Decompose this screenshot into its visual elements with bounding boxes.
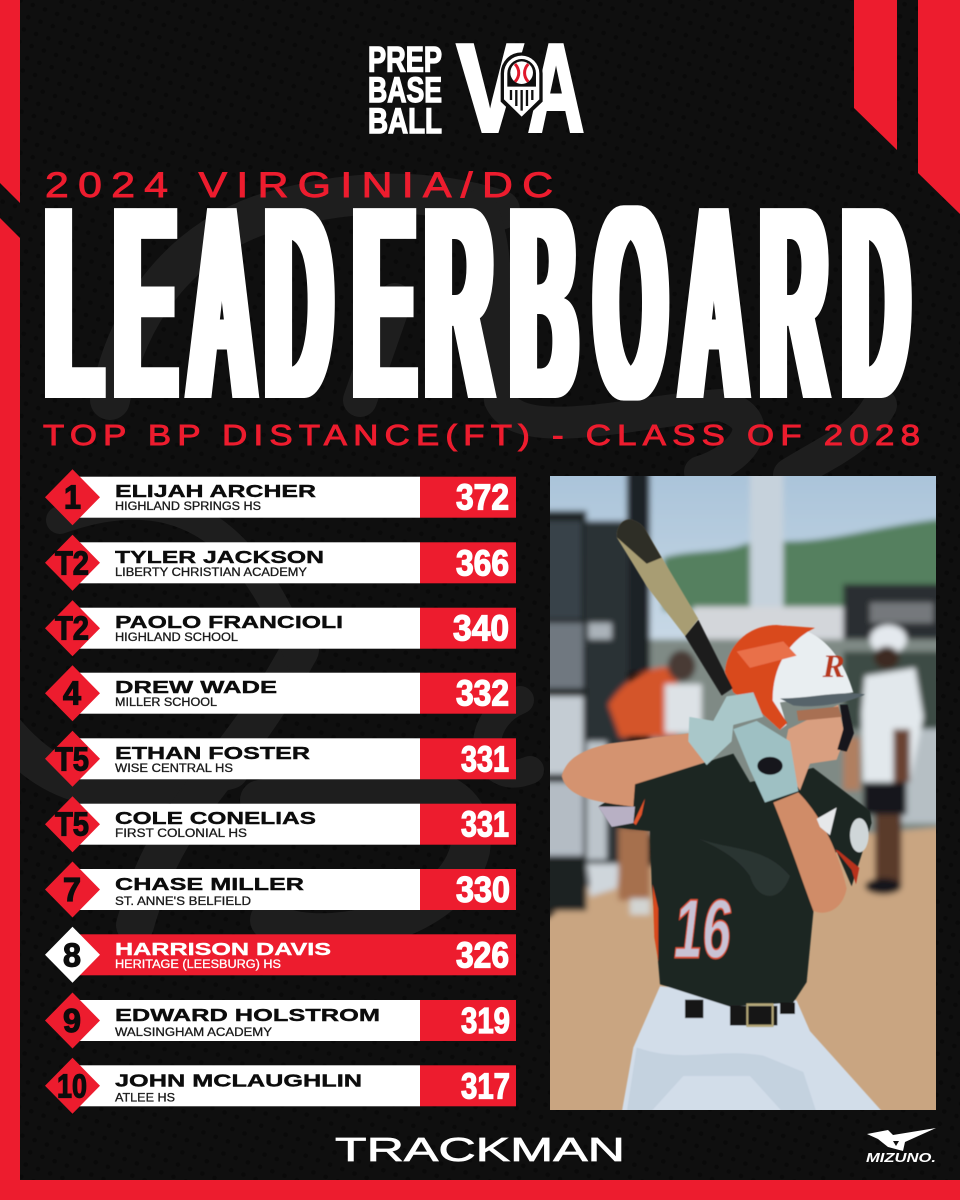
row 5: T5	[55, 740, 89, 777]
row 7: CHASE MILLER	[115, 874, 305, 894]
row 2	[45, 535, 516, 591]
row 8 highlighted: 8	[63, 936, 81, 973]
row 10: JOHN MCLAUGHLIN	[115, 1070, 362, 1090]
helmet logo: R	[822, 648, 845, 685]
logo wordmark: BALL	[368, 102, 442, 141]
title: Leaderboard: LEADERBOARD	[46, 148, 909, 457]
photo background, blurred field	[543, 468, 943, 1129]
row 4: 332	[456, 673, 509, 714]
row 7	[45, 862, 516, 918]
row 3: PAOLO FRANCIOLI	[115, 612, 343, 632]
logo wordmark: BASE	[368, 71, 442, 110]
row 5: WISE CENTRAL HS	[115, 763, 233, 775]
row 4: DREW WADE	[115, 677, 277, 697]
jersey number: 16	[674, 883, 731, 976]
row 8 highlighted: 326	[456, 934, 509, 975]
row 8 highlighted: HARRISON DAVIS	[115, 939, 331, 959]
row 3	[45, 600, 516, 656]
row 9: EDWARD HOLSTROM	[115, 1005, 380, 1025]
batter figure	[562, 519, 883, 1113]
row 6: FIRST COLONIAL HS	[115, 828, 247, 840]
row 9	[45, 992, 516, 1048]
icon: baseball shield	[501, 52, 543, 122]
row 1: 1	[64, 479, 81, 516]
row 10: 317	[461, 1065, 510, 1106]
row 4: MILLER SCHOOL	[115, 697, 218, 709]
row 3: 340	[453, 608, 509, 649]
icon: runbird	[867, 1128, 936, 1151]
row 5: 331	[461, 738, 509, 779]
row 10	[45, 1058, 516, 1114]
row 3: HIGHLAND SCHOOL	[115, 632, 239, 644]
row 1: 372	[456, 477, 509, 518]
row 5	[45, 731, 516, 787]
row 1: HIGHLAND SPRINGS HS	[115, 501, 261, 513]
row 5: ETHAN FOSTER	[115, 743, 311, 763]
row 9: WALSINGHAM ACADEMY	[115, 1027, 272, 1039]
row 9: 9	[63, 1002, 81, 1039]
row 7: ST. ANNE'S BELFIELD	[115, 896, 251, 908]
heading: 2024 Virginia/DC: 2024 VIRGINIA/DC	[45, 167, 553, 205]
row 4	[45, 665, 516, 721]
row 8 highlighted: HERITAGE (LEESBURG) HS	[115, 959, 281, 971]
row 6: COLE CONELIAS	[115, 808, 316, 828]
logo letters VA: V	[457, 20, 523, 158]
Mizuno wordmark: MIZUNO.	[866, 1150, 936, 1165]
row 1: ELIJAH ARCHER	[115, 481, 317, 501]
row 6: T5	[55, 806, 89, 843]
logo wordmark: PREP	[368, 40, 442, 80]
row 1	[45, 469, 516, 525]
photo: batter in stance	[543, 468, 943, 1129]
row 8 highlighted	[45, 927, 516, 983]
subheading: Top BP Distance: TOP BP DISTANCE(FT) - CLASS OF 2028	[43, 419, 920, 451]
row 2: 366	[456, 542, 509, 583]
row 2: LIBERTY CHRISTIAN ACADEMY	[115, 567, 307, 579]
row 10: 10	[57, 1067, 87, 1104]
row 3: T2	[55, 610, 89, 647]
row 6	[45, 796, 516, 852]
sponsor: Mizuno	[866, 1128, 936, 1165]
row 6: 331	[461, 804, 509, 845]
leaderboard list	[45, 469, 516, 1114]
row 7: 330	[456, 869, 510, 910]
row 9: 319	[461, 1000, 510, 1041]
row 2: T2	[55, 544, 89, 581]
logo letters VA: A	[528, 20, 584, 158]
row 2: TYLER JACKSON	[115, 547, 324, 567]
logo: Prep Baseball VA	[368, 20, 584, 158]
sponsor: Trackman: TRACKMAN	[335, 1131, 625, 1168]
row 10: ATLEE HS	[115, 1092, 175, 1104]
row 7: 7	[63, 871, 81, 908]
row 4: 4	[63, 675, 82, 712]
